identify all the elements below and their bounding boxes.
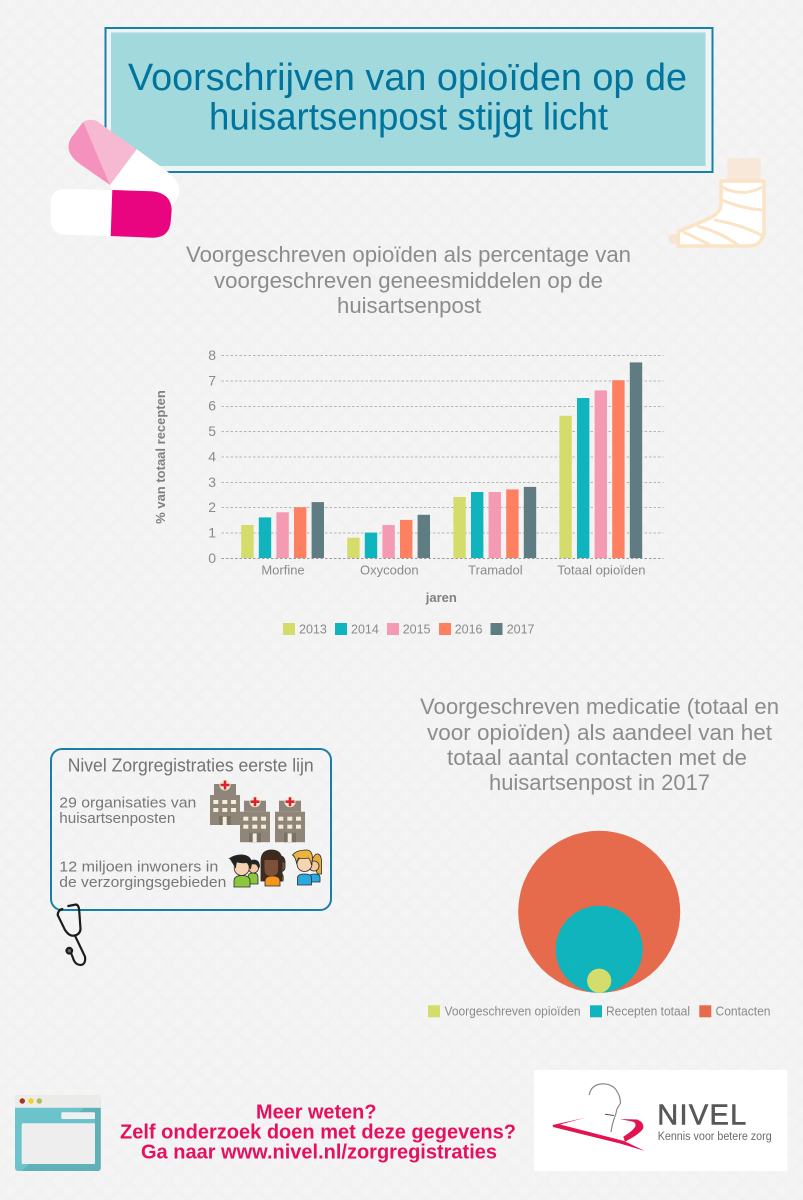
icon: hospital 3 [275, 796, 305, 842]
chart legend: 2016 [455, 622, 483, 636]
title banner [106, 28, 712, 172]
y axis ticks: 5 [208, 423, 216, 439]
y axis title: % van totaal recepten [153, 390, 168, 524]
text: organisations: huisartsenposten [59, 810, 175, 827]
logo mark [553, 1084, 645, 1151]
circle legend [428, 1004, 771, 1018]
icon: group of people [230, 850, 322, 887]
nested circle chart [428, 831, 771, 1018]
chart legend: 2015 [403, 622, 431, 636]
bars: Morfine [241, 502, 324, 558]
category labels: Oxycodon [360, 562, 419, 578]
text: organisations: 29 organisaties van [59, 794, 196, 812]
panel: Nivel Zorgregistraties [51, 749, 331, 910]
y axis ticks [208, 347, 216, 566]
circle legend: Recepten totaal [606, 1004, 690, 1018]
circle legend: Contacten [716, 1004, 771, 1018]
heading: nested circles: Voorgeschreven medicatie (totaal en [420, 694, 779, 719]
heading: percentage chart: voorgeschreven geneesmiddelen op de [214, 268, 603, 293]
chart legend: 2017 [507, 622, 535, 636]
circle legend: Voorgeschreven opioïden [444, 1004, 581, 1018]
heading: nested circles [420, 694, 779, 795]
bar chart: opioids as percentage of prescriptions [153, 347, 664, 636]
y axis ticks: 8 [208, 347, 216, 363]
heading: nested circles: huisartsenpost in 2017 [489, 770, 710, 795]
chart legend: 2013 [299, 622, 327, 636]
bars: Tramadol [453, 487, 536, 558]
call to action text: Zelf onderzoek doen met deze gegevens? [120, 1122, 516, 1144]
call to action text [120, 1102, 516, 1164]
logo wordmark: NIVEL [657, 1099, 746, 1131]
category labels: Morfine [261, 562, 305, 578]
call to action text: Ga naar www.nivel.nl/zorgregistraties [141, 1142, 497, 1164]
text: organisations [59, 794, 196, 827]
chart legend: 2014 [351, 622, 379, 636]
title text: Voorschrijven van opioïden op de [128, 57, 687, 99]
heading: percentage chart [186, 242, 631, 318]
category labels: Totaal opioïden [557, 562, 645, 578]
heading: nested circles: voor opioïden) als aandeel van het [427, 720, 773, 745]
bars: Oxycodon [347, 515, 430, 558]
logo tagline: Kennis voor betere zorg [658, 1131, 772, 1143]
heading: nested circles: totaal aantal contacten met de [447, 745, 747, 770]
panel heading: Nivel Zorgregistraties eerste lijn [68, 756, 314, 776]
icon: stethoscope [58, 904, 85, 965]
icon: pills [51, 120, 179, 238]
icon: hospital 1 [210, 780, 240, 825]
title text [128, 57, 687, 138]
icon: hospital 2 [240, 796, 270, 842]
logo: NIVEL [534, 1070, 787, 1171]
x axis title: jaren [425, 590, 457, 605]
call to action text: Meer weten? [256, 1102, 376, 1124]
text: inhabitants: 12 miljoen inwoners in [59, 858, 218, 876]
y axis ticks: 4 [208, 448, 216, 464]
y axis ticks: 3 [208, 474, 216, 490]
chart legend [283, 622, 535, 636]
y axis ticks: 2 [208, 499, 216, 515]
category labels [261, 562, 645, 578]
title text: huisartsenpost stijgt licht [209, 96, 608, 138]
icon: browser window [15, 1095, 101, 1171]
heading: percentage chart: huisartsenpost [337, 293, 482, 318]
y axis ticks: 1 [208, 524, 216, 540]
icon: foot in cast [668, 158, 764, 246]
text: inhabitants: de verzorgingsgebieden [59, 874, 226, 891]
text: inhabitants [59, 858, 226, 891]
y axis ticks: 0 [208, 550, 216, 566]
heading: percentage chart: Voorgeschreven opioïden als percentage van [186, 242, 631, 267]
y axis ticks: 7 [208, 372, 216, 388]
bars: Totaal opioïden [559, 362, 642, 558]
category labels: Tramadol [468, 562, 523, 578]
y axis ticks: 6 [208, 398, 216, 414]
